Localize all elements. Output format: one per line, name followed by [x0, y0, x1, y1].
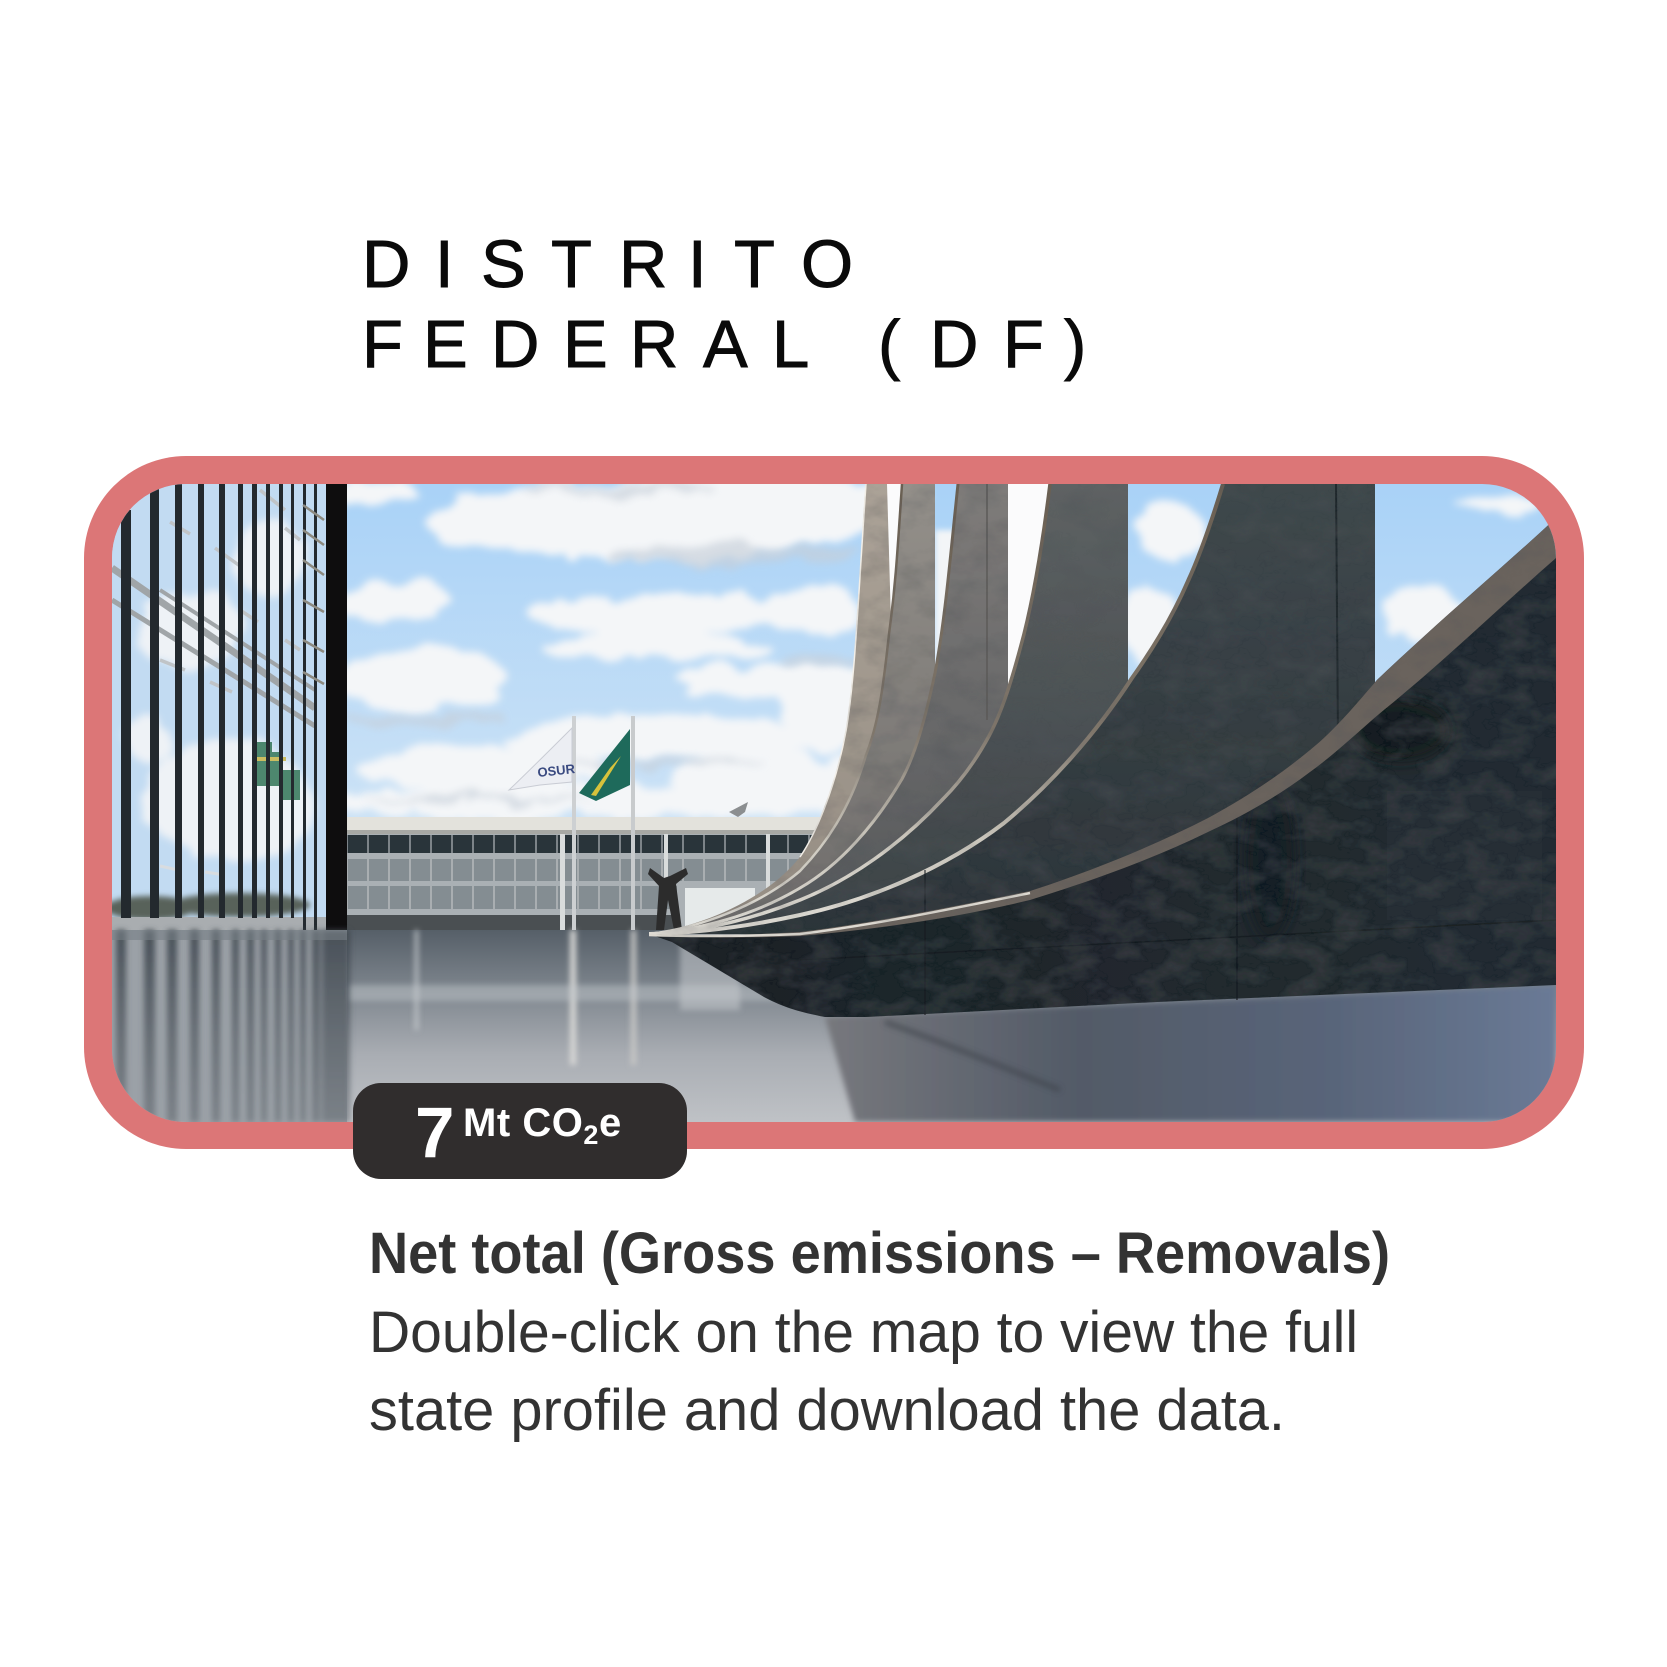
body line 1: Double-click on the map to view the full: [369, 1300, 1358, 1365]
title: DISTRITO: [362, 227, 853, 302]
flag poles: [572, 716, 576, 930]
reflected flag: [256, 742, 300, 800]
unit: 2: [583, 1120, 598, 1150]
title: FEDERAL(DF): [362, 307, 1086, 382]
distant palace building: [347, 802, 822, 930]
white block: [685, 888, 755, 928]
white Mercosur flag: OSUR: [537, 761, 576, 780]
panel: photo frame: [84, 456, 1584, 1149]
bold heading line: Net total (Gross emissions – Removals): [369, 1221, 1390, 1286]
clouds: [330, 474, 1546, 830]
unit: e: [599, 1101, 621, 1145]
white gaps between fins: [887, 484, 1048, 684]
green Brazilian flag: [579, 729, 630, 801]
description text: [369, 1221, 1390, 1443]
satellite dish: [729, 802, 748, 817]
concrete lip: [649, 518, 1556, 937]
dark right floor: [825, 985, 1556, 1122]
floor: [112, 930, 1556, 1122]
infographic canvas: [84, 240, 1584, 1442]
concrete fins: [649, 484, 1556, 1017]
white Mercosur flag: [509, 728, 576, 790]
statue: [648, 868, 688, 930]
photo: Brasilia palace architecture: [105, 474, 1556, 1122]
black column: [326, 484, 347, 930]
value number: 7: [415, 1094, 454, 1173]
body line 2: state profile and download the data.: [369, 1378, 1285, 1443]
value badge: [353, 1083, 687, 1179]
title: [362, 227, 1086, 382]
flags and poles: [509, 716, 635, 930]
frame border: [84, 456, 1584, 1149]
fin 4: [649, 484, 1128, 934]
fin 2: [649, 484, 935, 934]
fin 5: [649, 484, 1375, 934]
fin 3: [649, 484, 1008, 934]
front wall: [649, 518, 1556, 1017]
glass facade: [105, 484, 326, 930]
unit: Mt CO: [463, 1101, 583, 1145]
fin 1: [686, 484, 891, 926]
